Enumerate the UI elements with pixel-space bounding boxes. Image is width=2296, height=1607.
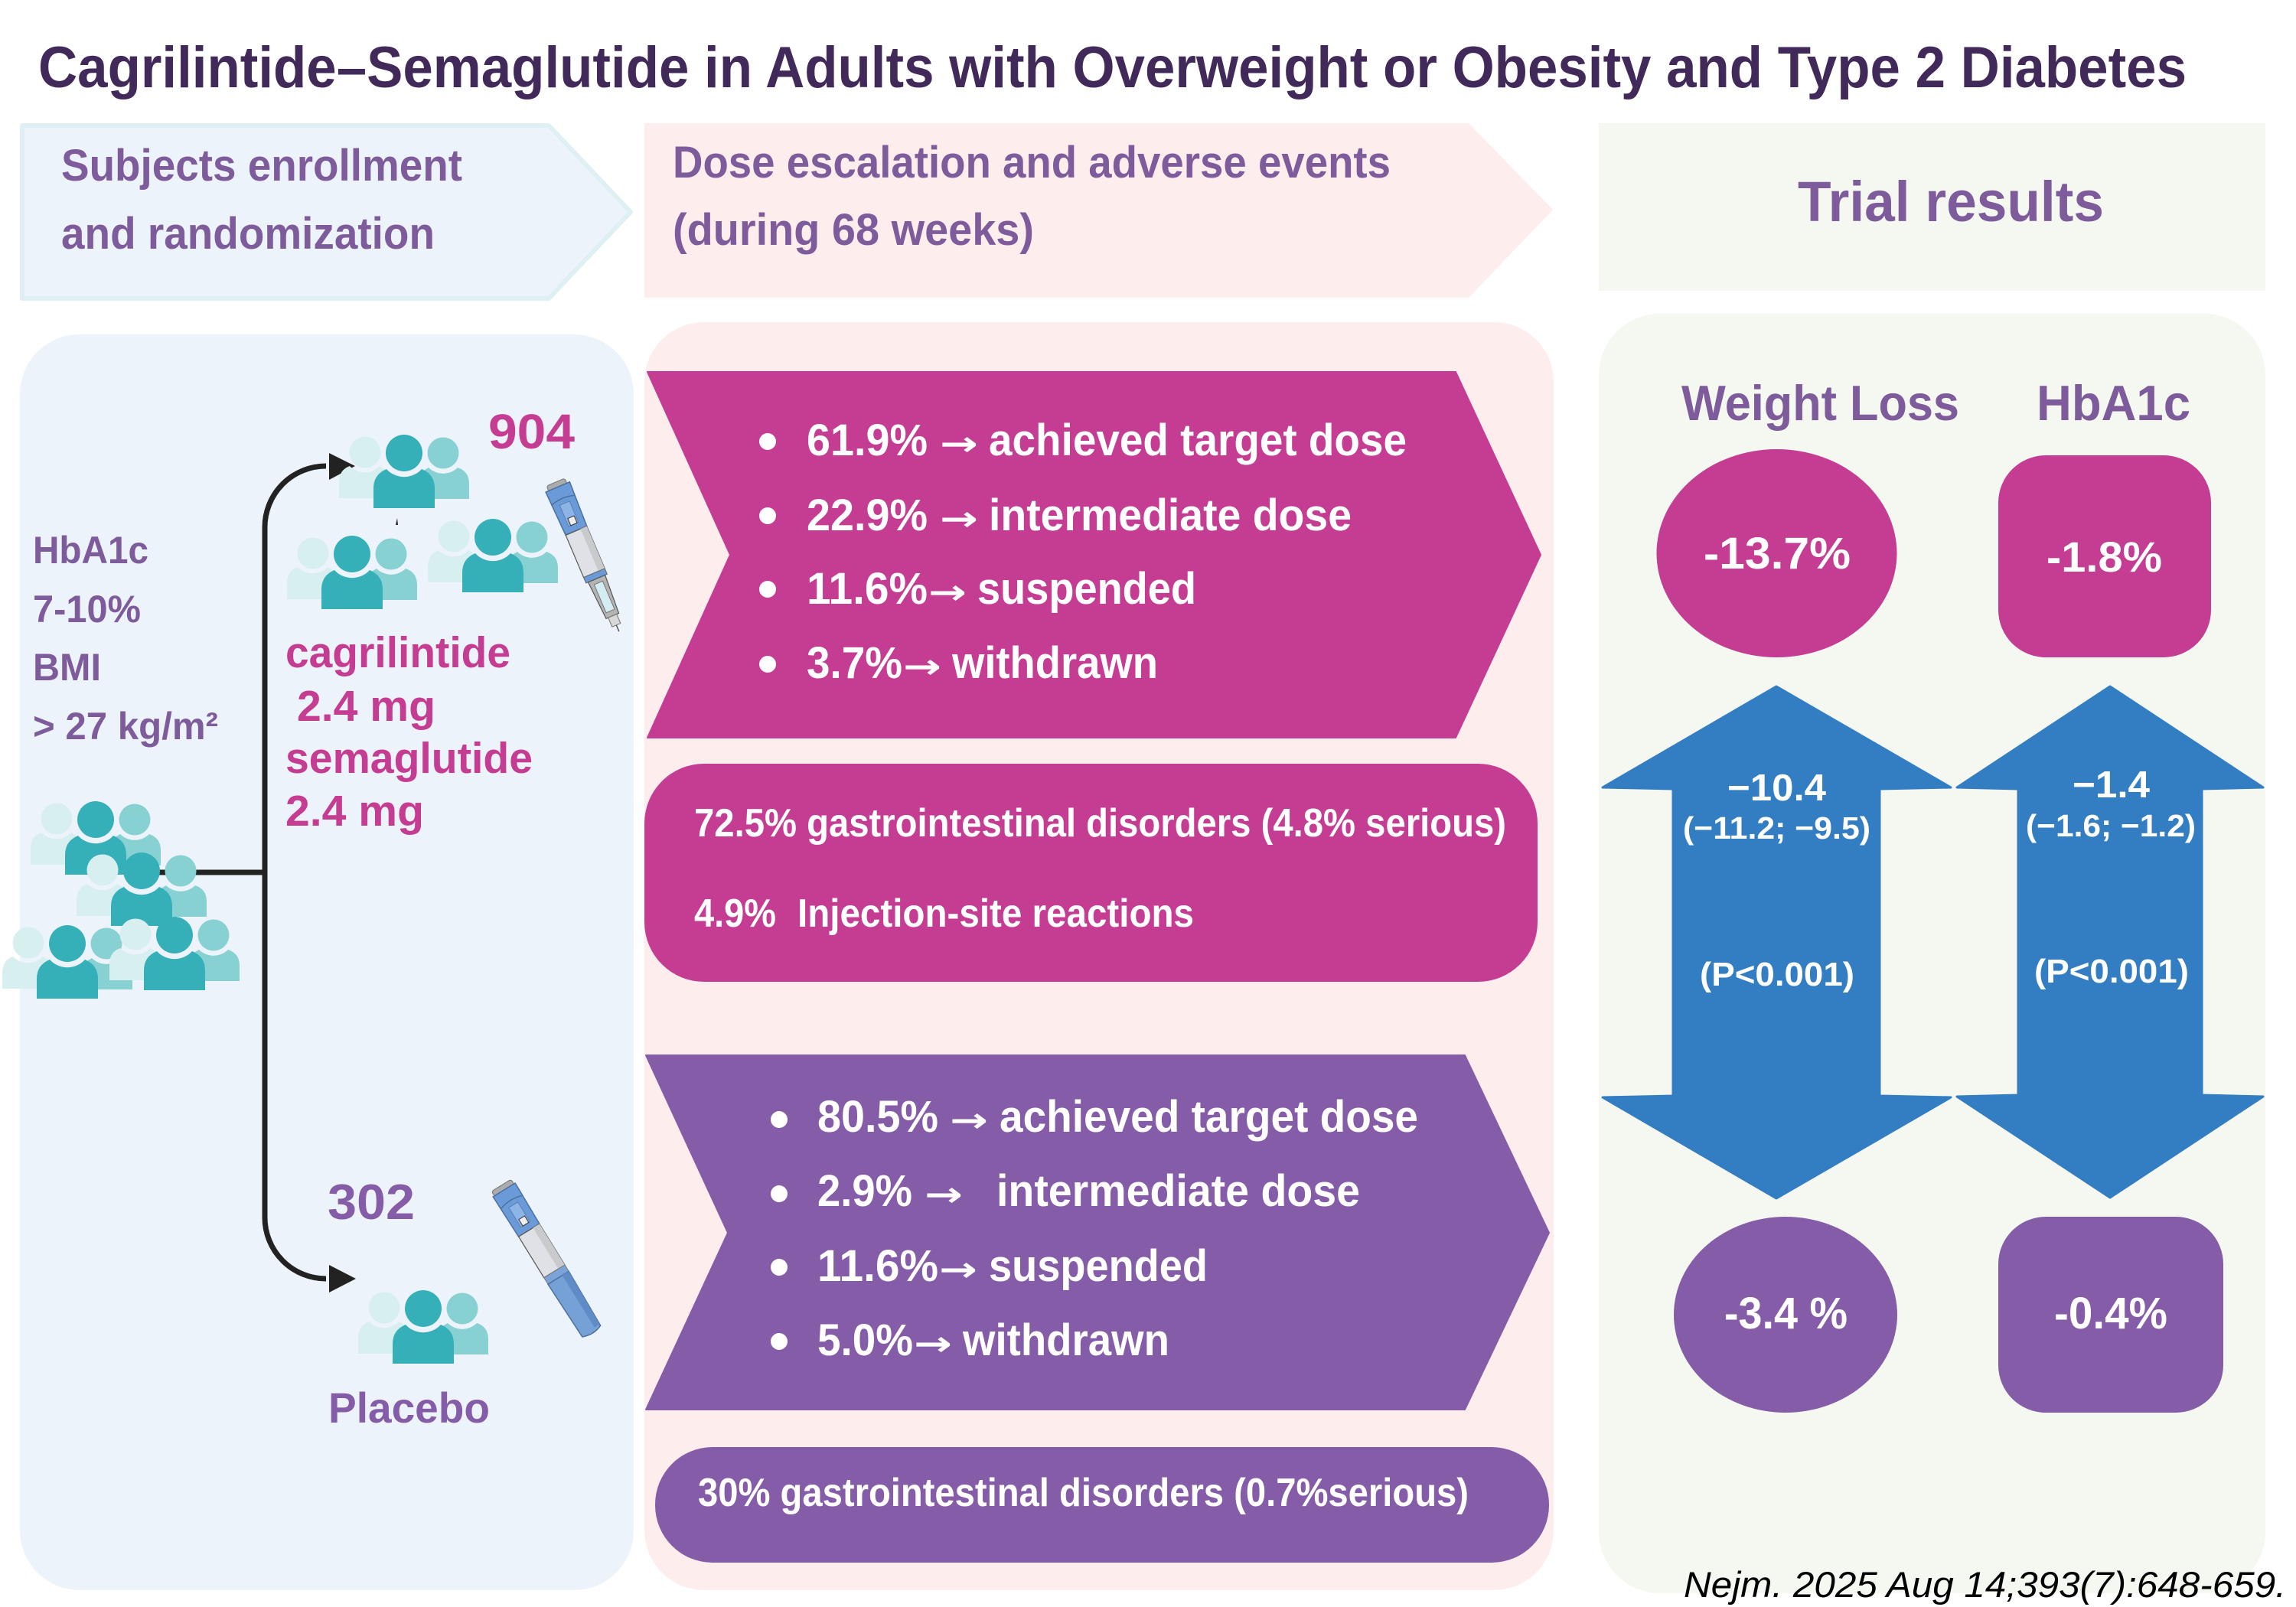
header: subjects enrollment and randomization: and randomization	[61, 209, 435, 259]
header: trial results	[1599, 123, 2265, 291]
label: treatment drugs: 2.4 mg	[285, 787, 424, 836]
arrow: randomization connector	[157, 453, 356, 1292]
chevron: treatment dose outcomes: suspended	[977, 564, 1196, 614]
chevron: treatment dose outcomes: withdrawn	[951, 638, 1158, 688]
label: treatment drugs: 2.4 mg	[297, 682, 435, 731]
header: subjects enrollment and randomization: Subjects enrollment	[61, 141, 462, 191]
label: treatment drugs	[285, 628, 533, 836]
chevron: placebo dose outcomes: withdrawn	[962, 1315, 1169, 1365]
chevron: placebo dose outcomes: →	[950, 1101, 988, 1140]
chevron: placebo dose outcomes: →	[925, 1175, 963, 1214]
chevron: treatment dose outcomes: →	[940, 500, 978, 539]
icon: treatment group people	[287, 435, 558, 609]
chevron: treatment dose outcomes: →	[940, 425, 978, 464]
icon: enrolled population crowd	[2, 801, 240, 999]
chevron: placebo dose outcomes: 5.0%	[817, 1315, 913, 1365]
arrow: HbA1c difference: −1.4	[2073, 764, 2150, 806]
header: subjects enrollment and randomization	[22, 125, 631, 298]
result: treatment weight loss: -13.7%	[1704, 529, 1851, 579]
chevron: placebo dose outcomes: 2.9%	[817, 1166, 912, 1216]
label: treatment drugs: semaglutide	[285, 734, 533, 783]
inclusion criteria: 7-10%	[33, 588, 141, 631]
chevron: treatment dose outcomes: →	[928, 573, 967, 612]
label: treatment drugs: cagrilintide	[285, 628, 510, 677]
arrow: HbA1c difference	[1957, 686, 2263, 1198]
chevron: treatment dose outcomes: 22.9%	[807, 491, 928, 540]
chevron: treatment dose outcomes: →	[903, 647, 941, 686]
callout: placebo adverse events: 30% gastrointestinal disorders (0.7%serious)	[698, 1471, 1469, 1515]
result: treatment HbA1c	[1998, 455, 2211, 657]
result: placebo weight loss	[1674, 1217, 1897, 1413]
chevron: placebo dose outcomes: 11.6%	[817, 1241, 938, 1291]
panel: enrollment and randomization	[2, 334, 634, 1590]
result: placebo HbA1c	[1998, 1217, 2223, 1413]
header: dose escalation and adverse events: Dose escalation and adverse events	[673, 138, 1391, 187]
chevron: placebo dose outcomes: →	[939, 1250, 977, 1289]
panel: dose escalation and adverse events	[644, 322, 1554, 1590]
icon: placebo injection pen	[491, 1178, 604, 1340]
column heading: HbA1c: HbA1c	[2037, 375, 2190, 431]
chevron: placebo dose outcomes: suspended	[989, 1241, 1208, 1291]
citation: Nejm. 2025 Aug 14;393(7):648-659.	[1684, 1564, 2286, 1605]
chevron: placebo dose outcomes	[646, 1055, 1549, 1410]
label: placebo: Placebo	[328, 1384, 490, 1432]
panel: trial results	[1599, 314, 2265, 1593]
callout: treatment adverse events: 4.9%	[694, 892, 776, 936]
header: dose escalation and adverse events: (during 68 weeks)	[673, 205, 1034, 255]
title: Cagrilintide–Semaglutide in Adults with Overweight or Obesity and Type 2 Diabetes	[38, 35, 2187, 100]
inclusion criteria: HbA1c	[33, 529, 148, 572]
chevron: treatment dose outcomes: 11.6%	[807, 564, 928, 614]
header: trial results: Trial results	[1798, 170, 2104, 233]
icon: treatment injection pen	[543, 477, 631, 637]
chevron: placebo dose outcomes: 80.5%	[817, 1092, 938, 1142]
arrow: HbA1c difference: (−1.6; −1.2)	[2026, 808, 2196, 843]
arrow: weight loss difference: −10.4	[1727, 768, 1826, 809]
inclusion criteria: BMI	[33, 646, 101, 689]
callout: treatment adverse events: 72.5% gastrointestinal disorders (4.8% serious)	[694, 801, 1506, 846]
count: treatment group: 904	[488, 404, 575, 459]
chevron: treatment dose outcomes: 61.9%	[807, 416, 928, 465]
inclusion criteria	[33, 529, 218, 748]
arrow: weight loss difference: (−11.2; −9.5)	[1683, 810, 1870, 846]
result: treatment HbA1c: -1.8%	[2047, 533, 2162, 581]
result: placebo weight loss: -3.4 %	[1724, 1289, 1848, 1338]
chevron: treatment dose outcomes: intermediate dose	[989, 491, 1352, 540]
arrow: weight loss difference: (P<0.001)	[1700, 956, 1854, 993]
arrow: HbA1c difference: (P<0.001)	[2034, 953, 2189, 990]
count: placebo group: 302	[328, 1174, 415, 1230]
result: treatment weight loss	[1656, 449, 1896, 657]
result: placebo HbA1c: -0.4%	[2054, 1289, 2167, 1338]
arrow: weight loss difference	[1603, 686, 1951, 1198]
chevron: placebo dose outcomes: intermediate dose	[996, 1166, 1360, 1216]
chevron: treatment dose outcomes	[647, 372, 1541, 738]
inclusion criteria: > 27 kg/m²	[33, 705, 218, 748]
chevron: placebo dose outcomes: →	[914, 1325, 952, 1364]
icon: placebo group people	[358, 1290, 488, 1364]
chevron: treatment dose outcomes: 3.7%	[807, 638, 902, 688]
chevron: treatment dose outcomes: achieved target dose	[989, 416, 1407, 465]
callout: treatment adverse events: Injection-site reactions	[797, 892, 1194, 936]
column heading: weight loss: Weight Loss	[1681, 375, 1959, 431]
chevron: placebo dose outcomes: achieved target dose	[1000, 1092, 1418, 1142]
header: dose escalation and adverse events	[644, 123, 1553, 298]
callout: treatment adverse events	[644, 764, 1538, 982]
callout: placebo adverse events	[655, 1447, 1549, 1563]
